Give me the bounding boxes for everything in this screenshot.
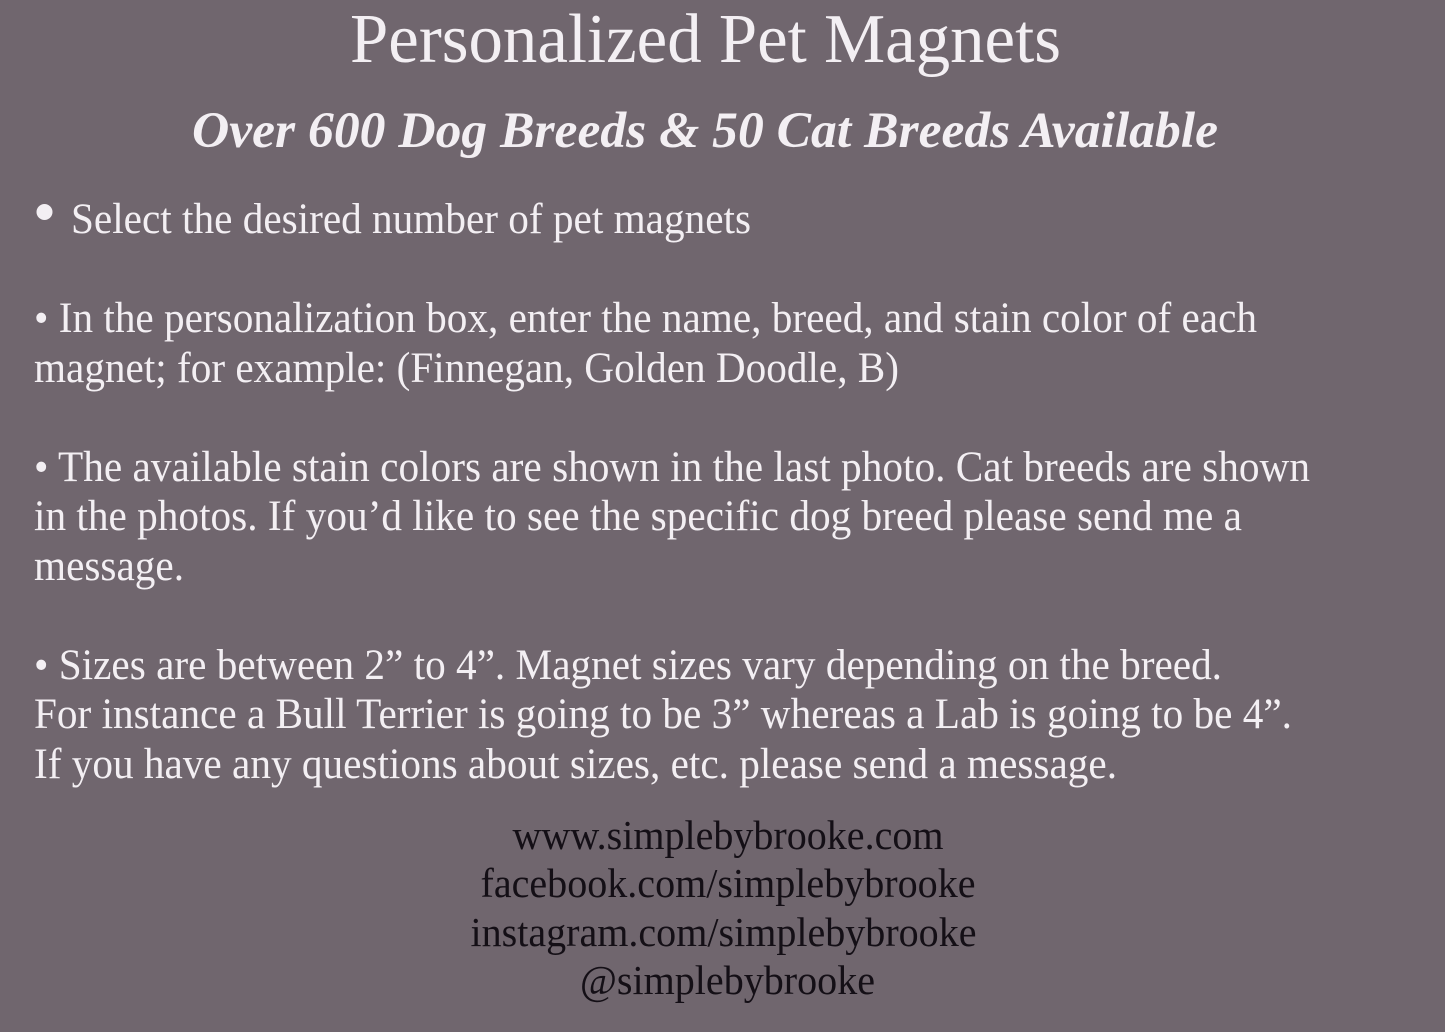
instruction: select number of magnets: Select the desired number of pet magnets (71, 196, 751, 243)
instruction: sizes: For instance a Bull Terrier is going to be 3” whereas a Lab is going to be 4”. (34, 691, 1292, 738)
contact links: @simplebybrooke (580, 957, 875, 1003)
title: Personalized Pet Magnets (350, 1, 1061, 78)
contact links: www.simplebybrooke.com (512, 812, 944, 858)
instruction: personalization box: magnet; for example: (Finnegan, Golden Doodle, B) (34, 345, 899, 392)
contact links: facebook.com/simplebybrooke (480, 860, 976, 906)
instruction: stain colors and breeds: in the photos. If you’d like to see the specific dog breed please send me a (34, 493, 1242, 540)
instruction: stain colors and breeds: message. (34, 543, 184, 590)
instruction: stain colors and breeds (34, 444, 1310, 590)
instruction: stain colors and breeds: • The available stain colors are shown in the last photo. Cat breeds are shown (34, 444, 1310, 491)
instruction: sizes: • Sizes are between 2” to 4”. Magnet sizes vary depending on the breed. (34, 642, 1222, 689)
instruction: personalization box: • In the personalization box, enter the name, breed, and stain color of each (34, 295, 1257, 342)
contact links: instagram.com/simplebybrooke (470, 909, 976, 955)
instruction: sizes (34, 642, 1292, 788)
instruction: sizes: If you have any questions about sizes, etc. please send a message. (34, 741, 1117, 788)
instruction: personalization box (34, 295, 1257, 392)
icon: large bullet (36, 204, 52, 220)
subtitle: Over 600 Dog Breeds & 50 Cat Breeds Available (192, 103, 1218, 159)
contact links (470, 812, 976, 1003)
